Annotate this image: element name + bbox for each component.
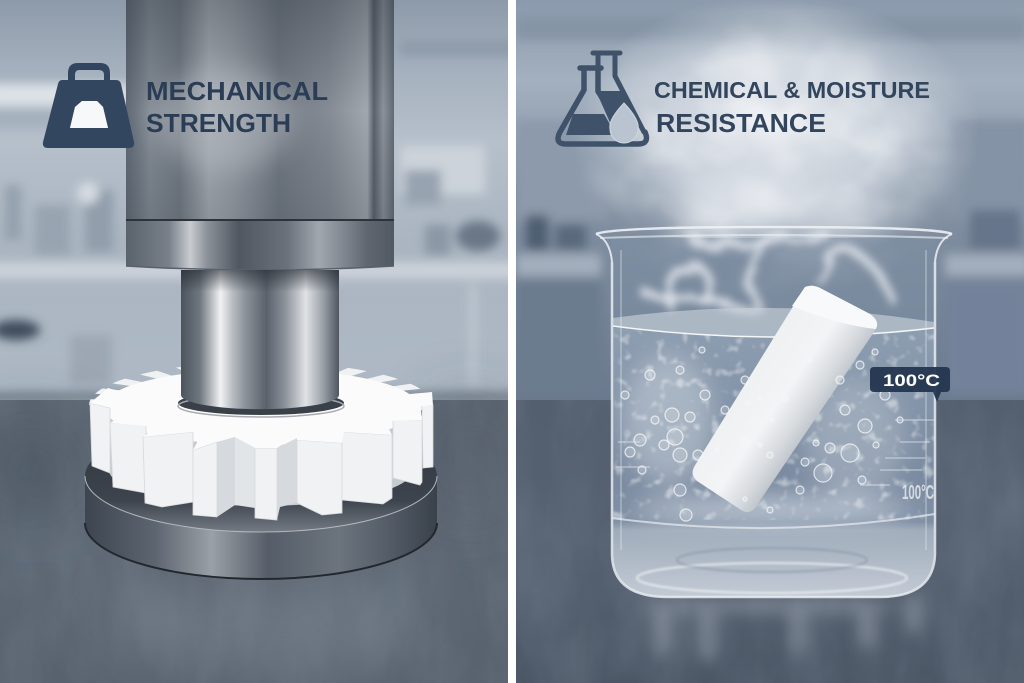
droplet	[610, 103, 638, 143]
heading: mechanical strength	[146, 82, 328, 132]
heading: chemical and moisture resistance: RESISTANCE	[656, 110, 826, 138]
back flask liquid	[600, 91, 628, 122]
front flask liquid	[566, 114, 616, 135]
bright bubble clusters	[623, 355, 912, 522]
gear top face outline	[90, 388, 433, 450]
icon: weight	[43, 63, 134, 148]
upper press cylinder	[126, 0, 394, 270]
graduation label: 100°C	[902, 482, 934, 504]
beaker reflection on table	[642, 596, 921, 660]
lower press plunger	[178, 270, 344, 417]
gear teeth	[90, 403, 433, 520]
heading: chemical and moisture resistance: CHEMICAL & MOISTURE	[654, 77, 930, 103]
callout: temperature 100°C: 100°C	[883, 371, 940, 390]
table surface	[516, 400, 1024, 683]
beaker interior	[664, 238, 934, 322]
base plate	[85, 420, 437, 579]
beaker rim	[596, 227, 952, 262]
bubbles	[621, 347, 903, 521]
beaker graduation marks	[616, 420, 935, 485]
table surface	[0, 400, 508, 683]
panel: chemical and moisture resistance	[516, 0, 1024, 683]
glass beaker	[596, 227, 952, 600]
white ceramic gear	[90, 366, 433, 520]
cylinder highlight	[155, 70, 295, 170]
heading: chemical and moisture resistance	[654, 82, 930, 132]
beaker walls	[612, 250, 935, 597]
steam cloud	[584, 3, 969, 268]
icon: flasks and droplet	[558, 53, 646, 144]
ceramic rod	[693, 286, 877, 512]
panel: mechanical strength	[0, 0, 520, 683]
blurred laboratory background	[0, 0, 520, 683]
back flask	[593, 53, 644, 132]
heading: mechanical strength: MECHANICAL	[146, 76, 328, 106]
press collar	[126, 221, 394, 270]
steam wisps inside beaker	[640, 235, 890, 308]
callout: temperature 100°C	[870, 367, 950, 402]
water	[613, 320, 935, 600]
heading: mechanical strength: STRENGTH	[146, 108, 291, 138]
front flask	[558, 68, 646, 144]
blurred laboratory background	[516, 0, 1024, 683]
water surface foam	[613, 308, 934, 337]
